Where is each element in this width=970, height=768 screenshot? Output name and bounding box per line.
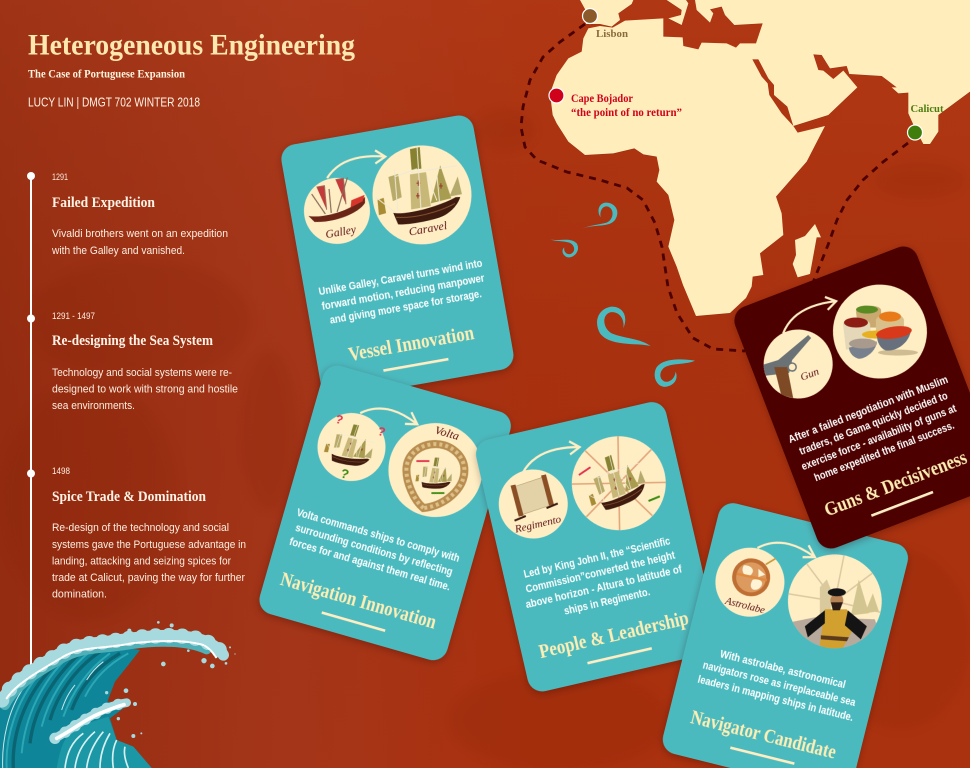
card: Navigation Innovation: [256, 362, 514, 664]
icon: ship with question marks: ?: [339, 465, 351, 482]
timeline entry: 1291: [51, 172, 228, 257]
description: above horizon - Altura to latitude of: [525, 563, 683, 611]
timeline entry: 1498: [52, 466, 246, 600]
description: Volta commands ships to comply with: [295, 507, 461, 565]
icon: caravel: Caravel: [408, 218, 449, 239]
card heading: People & Leadership: [537, 607, 691, 663]
card heading: Navigation Innovation: [278, 568, 439, 634]
description: forward motion, reducing manpower: [321, 272, 486, 313]
timeline entry: 1291: Vivaldi brothers went on an expedition: [52, 228, 228, 240]
description: With astrolabe, astronomical: [719, 648, 847, 691]
icon: spices: [819, 271, 941, 392]
sea route: to Calicut: [812, 143, 908, 285]
author line: LUCY LIN | DMGT 702 WINTER 2018: [28, 96, 200, 110]
icon: astrolabe: [708, 540, 792, 624]
marker: Cape Bojador: “the point of no return”: [571, 107, 682, 119]
arrow: gun to spices: [776, 294, 840, 333]
description: [518, 534, 687, 626]
card: Vessel Innovation: [279, 113, 516, 401]
icon: regimento scroll: [492, 463, 575, 545]
timeline entry: 1291 - 1497: Re-designing the Sea System: [52, 333, 213, 349]
timeline entry: 1498: Re-design of the technology and social: [52, 522, 229, 534]
arrow: astrolabe to navigator: [757, 533, 817, 562]
timeline entry: 1291 - 1497: designed to work with strong and hostile: [52, 384, 238, 396]
icon: gun: Gun: [799, 365, 821, 384]
card heading: Vessel Innovation: [347, 322, 476, 366]
description: Unlike Galley, Caravel turns wind into: [318, 258, 484, 298]
card: People & Leadership: [473, 399, 721, 694]
timeline entry: 1498: 1498: [52, 466, 70, 477]
great wave illustration: [0, 621, 236, 768]
arrow: regimento to chart: [518, 439, 582, 473]
icon: astrolabe: Astrolabe: [723, 596, 766, 617]
timeline entry: 1498: systems gave the Portuguese advantage in: [52, 539, 246, 551]
description: [287, 507, 461, 594]
timeline entry: 1291 - 1497: sea environments.: [52, 400, 135, 412]
arrow: galley to caravel: [324, 149, 387, 178]
description: and giving more space for storage.: [329, 288, 483, 327]
description: leaders in mapping ships in latitude.: [696, 674, 855, 724]
description: [696, 645, 862, 724]
timeline entry: 1498: trade at Calicut, paving the way for further: [52, 572, 245, 584]
marker: Lisbon: Lisbon: [596, 28, 628, 40]
description: [787, 374, 966, 488]
subtitle: The Case of Portuguese Expansion: [28, 66, 185, 80]
icon: ship with question marks: ?: [334, 412, 345, 427]
description: Led by King John II, the “Scientific: [523, 535, 671, 581]
timeline entry: 1291: 1291: [52, 172, 68, 183]
timeline entry: 1498: landing, attacking and seizing spices for: [52, 556, 231, 568]
title: Heterogeneous Engineering: [28, 28, 355, 62]
wind swirls: [550, 203, 695, 387]
icon: caravel: [363, 133, 479, 252]
timeline entry: 1291 - 1497: [52, 311, 238, 412]
arrow: uncertain ship to volta: [360, 399, 420, 429]
timeline entry: 1291 - 1497: Technology and social systems were re-: [52, 367, 232, 379]
timeline entry: 1291 - 1497: 1291 - 1497: [52, 311, 95, 322]
icon: ship with question marks: ?: [376, 424, 387, 439]
description: surrounding conditions by reflecting: [294, 522, 454, 578]
icon: ship with question marks: [309, 405, 394, 490]
icon: gun: [763, 329, 833, 399]
description: forces for and against them real time.: [288, 536, 452, 593]
timeline entry: 1498: domination.: [52, 588, 107, 600]
marker: Cape Bojador: [549, 88, 682, 119]
marker: Lisbon: [582, 8, 628, 40]
description: After a failed negotiation with Muslim: [787, 374, 950, 446]
timeline entry: 1291: Failed Expedition: [52, 195, 156, 211]
icon: navigator portrait: [788, 554, 882, 649]
card: Guns & Decisiveness: [729, 242, 970, 553]
sea route: Lisbon around Africa: [521, 24, 745, 351]
icon: volta rope: Volta: [433, 423, 461, 443]
icon: regimento scroll: Regimento: [513, 513, 563, 536]
marker: Calicut: [908, 103, 944, 140]
icon: galley: Galley: [325, 224, 358, 241]
description: navigators rose as irreplaceable sea: [701, 659, 857, 709]
marker: Cape Bojador: Cape Bojador: [571, 93, 633, 105]
marker: Calicut: Calicut: [910, 103, 944, 115]
timeline axis: [27, 172, 35, 666]
description: Commission”converted the height: [525, 550, 677, 596]
map of Africa and Eurasia: [550, 0, 970, 316]
icon: volta rope: [377, 412, 494, 528]
description: ships in Regimento.: [563, 586, 651, 618]
icon: ship on altitude chart: [552, 416, 686, 550]
card: Navigator Candidate: [660, 500, 911, 768]
timeline entry: 1291: with the Galley and vanished.: [51, 245, 185, 257]
icon: galley: [299, 173, 375, 249]
description: [318, 258, 489, 328]
timeline entry: 1498: Spice Trade & Domination: [52, 489, 207, 505]
